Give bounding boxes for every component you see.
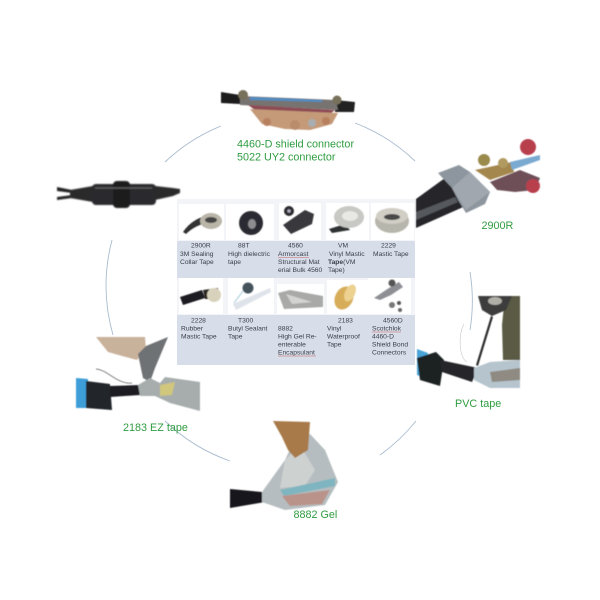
captions row 2: Scotchlok [372,326,402,332]
product table panel [177,199,415,365]
captions row 1: 88T [238,242,250,250]
captions row 2: 8882 [278,326,293,332]
captions row 1: Tape) [328,267,345,274]
label: top connectors: 5022 UY2 connector [237,152,336,164]
captions row 1: 4560 [288,242,303,250]
photo: 2900R connector [416,139,540,228]
thumbnail: 88T tape [239,211,263,235]
captions row 2: Tape [228,334,243,340]
captions row 2: enterable [278,342,306,348]
cycle ring arcs [106,123,472,461]
captions row 2: High Gel Re- [278,334,317,340]
photo: top shield connector [221,90,355,130]
captions row 2: 2183 [338,318,353,324]
thumbnail: 2183 tape [331,283,358,313]
label: 2183 EZ tape: 2183 EZ tape [123,422,188,434]
captions row 1: Collar Tape [180,259,214,266]
caption band row 2 [177,315,415,365]
photo: PVC tape application [417,296,520,388]
spelling underlines [278,258,401,356]
caption band row 1 [177,241,415,278]
captions row 1: 3M Sealing [180,251,214,258]
captions row 2: 2228 [191,318,206,324]
captions row 2: Rubber [181,326,204,332]
captions row 1: 2229 [381,242,396,250]
captions row 2: Butyl Sealant [228,326,268,332]
thumbnail: 8882 gel bag [278,290,323,309]
thumbnail cards [179,203,414,314]
captions row 2 [181,318,408,356]
thumbnail: 4560 armorcast [283,206,314,234]
captions row 2: Shield Bond [372,342,408,348]
captions row 2: Vinyl [327,326,342,332]
thumbnail: 2229 tape [375,208,409,233]
thumbnail: 2900R tape [183,213,222,234]
thumbnail: VM tape [329,206,364,233]
captions row 2: Connectors [372,350,407,356]
captions row 1: tape [228,259,241,266]
captions row 2: Waterproof [327,334,360,340]
captions row 1: Armorcast [278,251,309,258]
captions row 1: Mastic Tape [373,251,409,258]
captions row 1: VM [338,242,348,250]
thumbnail: T300 tube [233,282,271,310]
photo: 2183 EZ tape [76,337,200,411]
captions row 2: 4560D [383,318,403,324]
label: 2900R: 2900R [482,220,514,232]
captions row 1: Vinyl Mastic [329,251,365,258]
label: 8882 Gel: 8882 Gel [294,509,337,521]
captions row 2: Mastic Tape [181,334,217,340]
label: top connectors [237,138,354,164]
faint wire [460,324,467,362]
captions row 1: High dielectric [228,251,271,258]
captions row 1: 2900R [191,242,211,250]
thumbnail: 4560D connector [374,280,403,312]
captions row 2: T300 [238,318,254,324]
captions row 1: erial Bulk 4560 [278,267,323,274]
captions row 2: Encapsulant [278,350,315,356]
captions row 1 [180,242,409,274]
captions row 1: Structural Mat [278,259,320,266]
captions row 2: 4460-D [372,334,394,340]
photo: 8882 gel bag [230,421,338,510]
captions row 1: Tape(VM [328,259,356,266]
thumbnail: 2228 tape [180,288,221,305]
label: top connectors: 4460-D shield connector [237,138,354,150]
label: PVC tape: PVC tape [455,398,501,410]
captions row 2: Tape [327,342,342,348]
photo: left cable joint [57,181,180,208]
